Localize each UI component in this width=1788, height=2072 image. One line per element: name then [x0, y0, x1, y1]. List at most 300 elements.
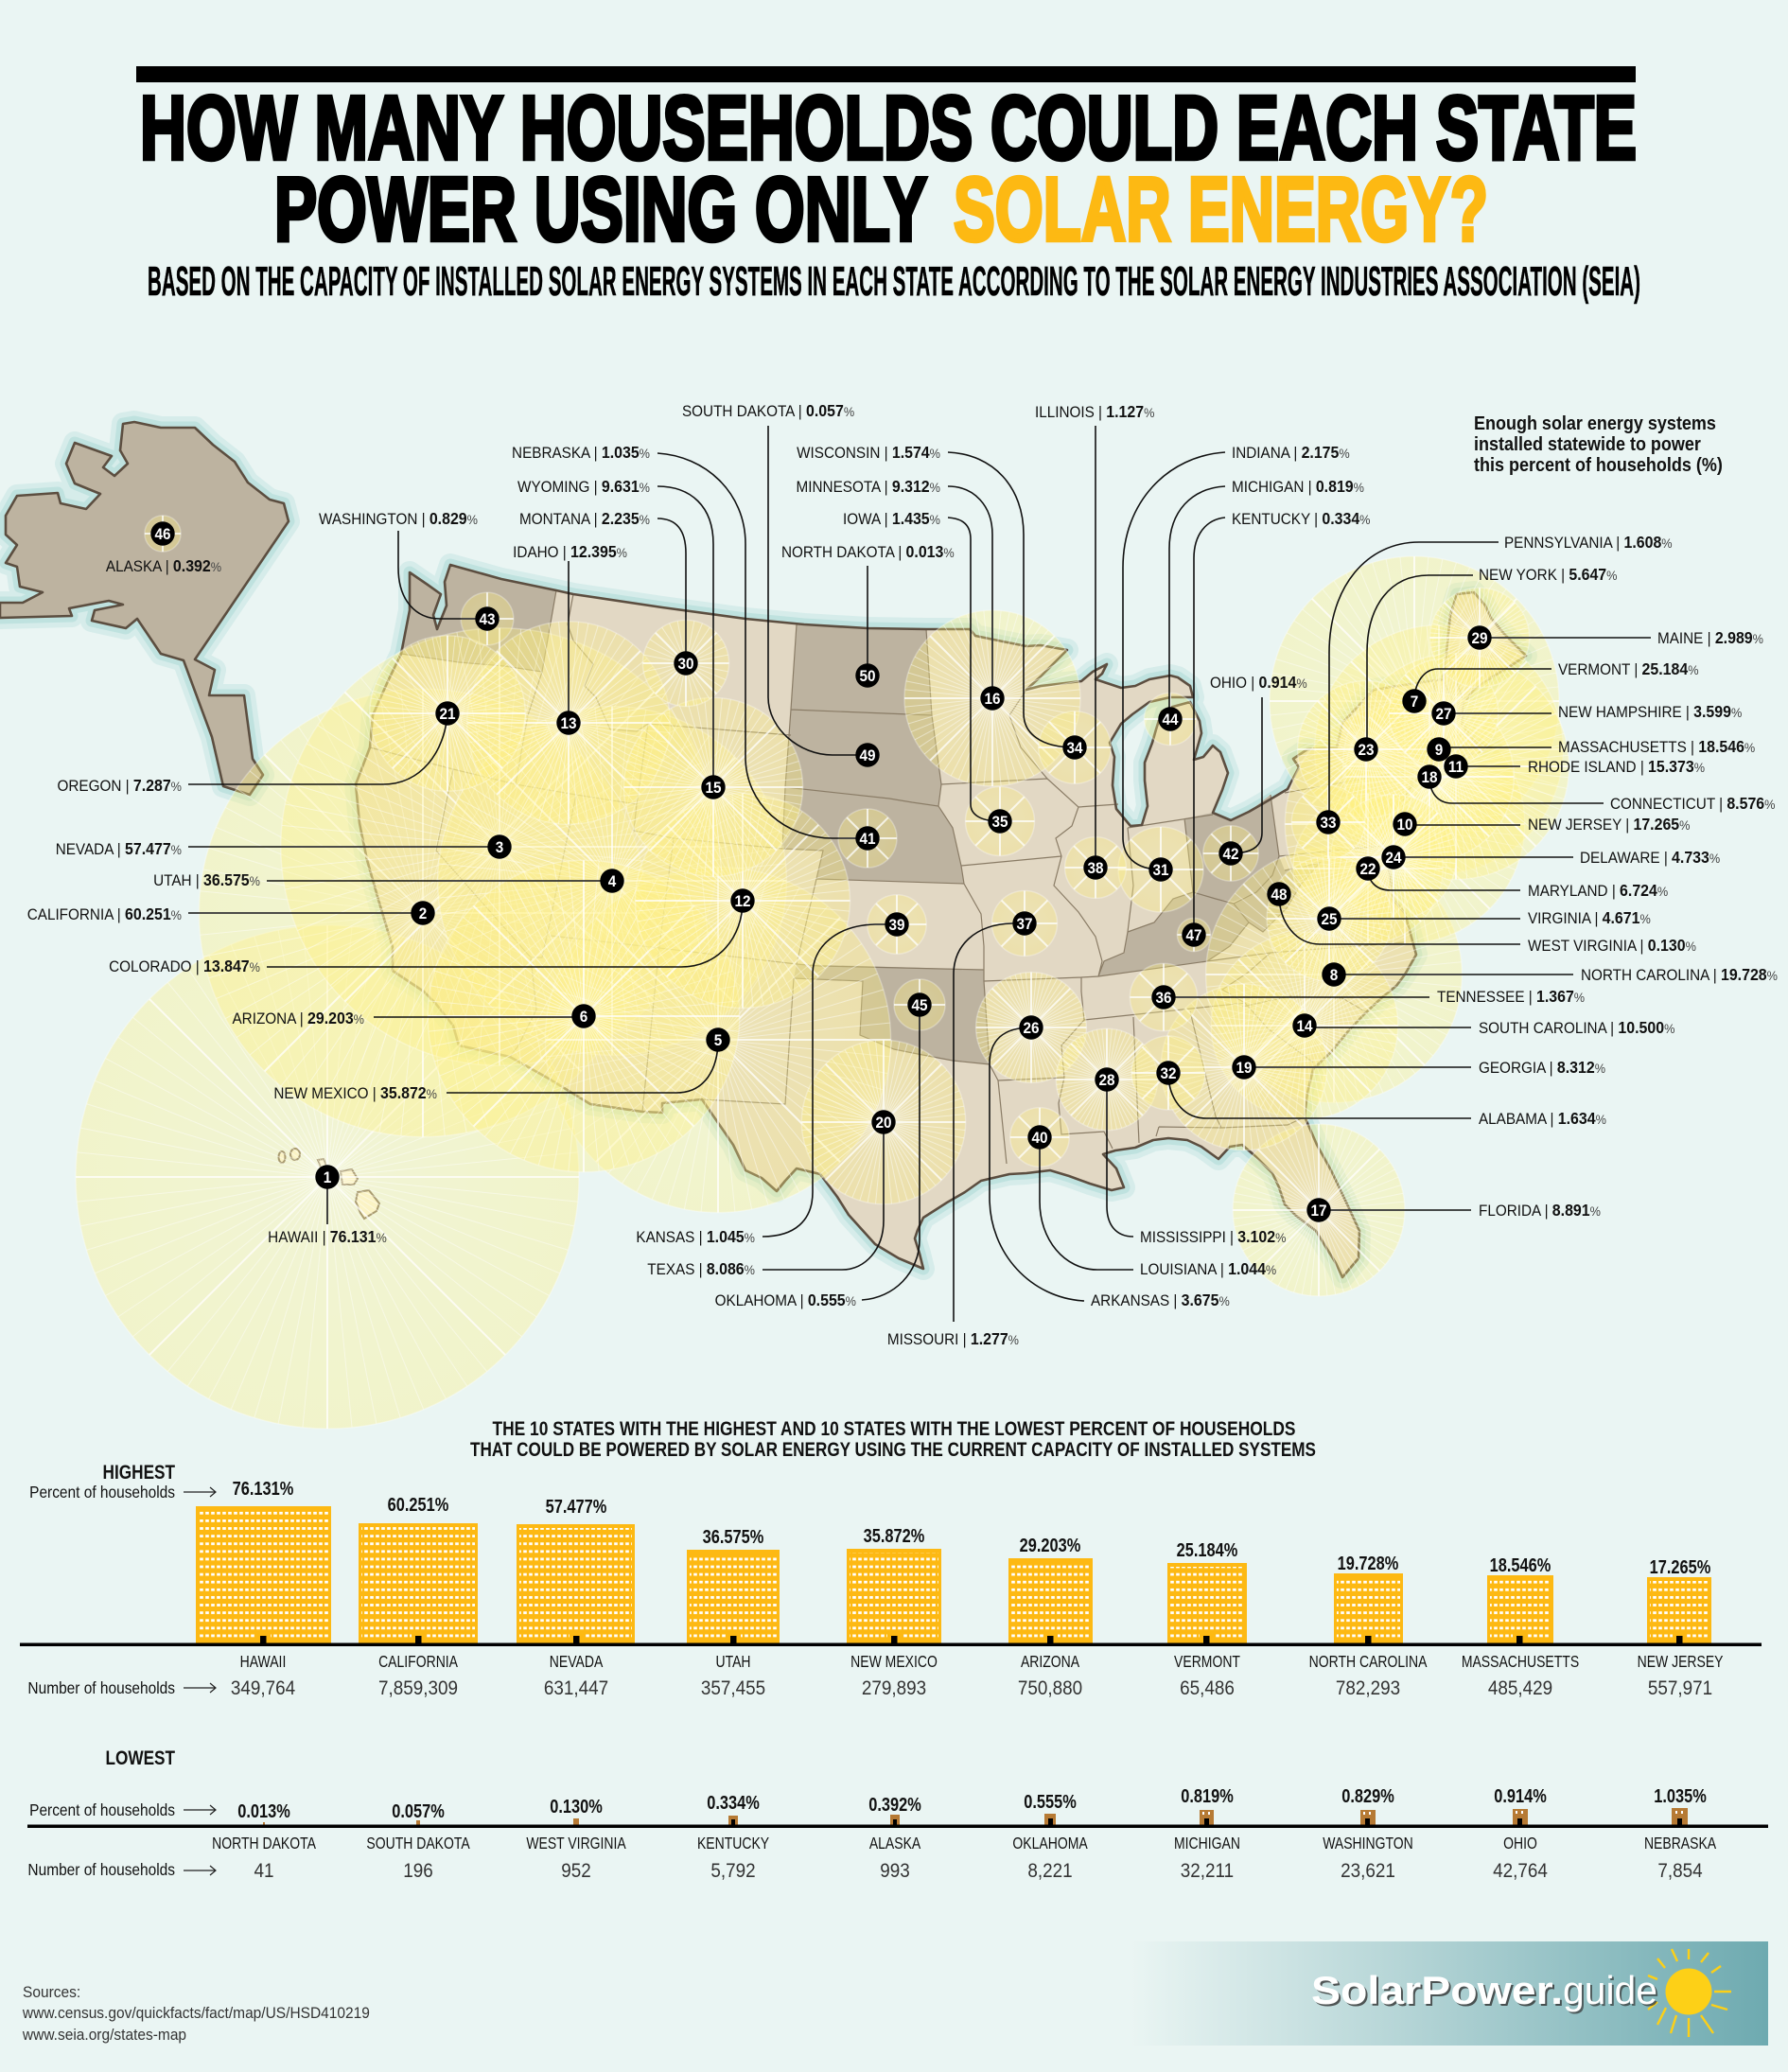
state names: NEW MEXICO	[850, 1654, 938, 1671]
logo wordmark: guide	[1563, 1968, 1657, 2012]
state label: Nebraska	[512, 443, 880, 851]
state label: Maryland: 22	[1359, 860, 1376, 878]
household counts: 782,293	[1336, 1677, 1400, 1699]
state label: Delaware: DELAWARE | 4.733%	[1580, 848, 1720, 867]
state label: Louisiana: 40	[1031, 1129, 1048, 1147]
state label: Texas	[647, 1110, 896, 1278]
state label: Colorado	[109, 888, 755, 975]
state label: West Virginia: 48	[1271, 886, 1288, 904]
state label: New Mexico: 5	[714, 1031, 722, 1049]
state label: Michigan: MICHIGAN | 0.819%	[1232, 477, 1364, 496]
percent values: 35.872%	[864, 1524, 924, 1546]
sources: Sources:	[23, 1985, 80, 2001]
state names: HAWAII	[240, 1654, 286, 1671]
state names: MICHIGAN	[1174, 1835, 1240, 1853]
percent values: 25.184%	[1177, 1538, 1237, 1560]
state label: Rhode Island: 11	[1448, 758, 1464, 776]
state label: North Dakota	[781, 542, 955, 688]
state label: Connecticut	[1417, 764, 1776, 813]
logo wordmark: guide	[1565, 1970, 1659, 2014]
state label: Vermont: 7	[1411, 693, 1418, 711]
sun: Louisiana	[998, 1096, 1081, 1179]
legend note: this percent of households (%)	[1474, 455, 1723, 476]
state label: New Hampshire	[1431, 701, 1742, 726]
household counts: 42,764	[1493, 1860, 1548, 1882]
row captions: highest: Percent of households	[29, 1483, 175, 1501]
state label: Missouri	[887, 911, 1037, 1348]
percent values: 0.914%	[1494, 1784, 1547, 1806]
sun: Pennsylvania	[1276, 770, 1380, 874]
state label: Wisconsin	[797, 443, 1087, 760]
sun: Washington	[461, 592, 514, 645]
state label: Alaska: ALASKA | 0.392%	[106, 556, 221, 575]
household counts: 65,486	[1180, 1677, 1235, 1699]
household counts: 631,447	[544, 1677, 608, 1699]
sun: Texas	[767, 1006, 1000, 1238]
sun: Oklahoma	[894, 979, 945, 1030]
state names: OKLAHOMA	[1012, 1835, 1088, 1853]
hawaiian islands	[278, 1149, 379, 1219]
legend note: installed statewide to power	[1474, 434, 1701, 455]
state names: OHIO	[1503, 1835, 1537, 1853]
state label: Michigan: 44	[1162, 711, 1179, 729]
state names	[240, 1654, 1724, 1671]
sun: Massachusetts	[1263, 573, 1615, 925]
state names: WASHINGTON	[1323, 1835, 1413, 1853]
sources: www.seia.org/states-map	[22, 2028, 186, 2044]
household counts: 952	[561, 1860, 591, 1882]
state label: Utah: UTAH | 36.575%	[153, 870, 260, 889]
state label: Georgia	[1232, 1055, 1605, 1080]
sun: Delaware	[1305, 768, 1482, 946]
state label: Delaware: 24	[1385, 849, 1402, 867]
state label: Kentucky	[1182, 509, 1371, 947]
state label: Wisconsin: 34	[1066, 739, 1083, 757]
state names: NEW JERSEY	[1638, 1654, 1724, 1671]
state label: Massachusetts: 9	[1435, 741, 1443, 759]
household counts: 993	[880, 1860, 910, 1882]
row captions: lowest	[27, 1748, 216, 1879]
percent values: 0.130%	[550, 1795, 603, 1817]
state label: Kansas: 39	[888, 916, 905, 934]
sun: Connecticut	[1310, 658, 1549, 896]
state names: CALIFORNIA	[378, 1654, 458, 1671]
percent values: 36.575%	[703, 1525, 763, 1547]
household counts: 557,971	[1648, 1677, 1712, 1699]
sources: www.census.gov/quickfacts/fact/map/US/HSD410219	[22, 2006, 370, 2022]
state label: New Jersey: 10	[1396, 816, 1413, 834]
tiny bars	[263, 1808, 1688, 1825]
sun: Nebraska	[826, 797, 909, 880]
state names: UTAH	[715, 1654, 751, 1671]
sources	[22, 1985, 370, 2044]
sun: Ohio	[1192, 815, 1270, 892]
state label: Massachusetts: MASSACHUSETTS | 18.546%	[1558, 737, 1755, 756]
household counts: 485,429	[1488, 1677, 1552, 1699]
state label: Louisiana: LOUISIANA | 1.044%	[1140, 1259, 1276, 1278]
state label: New Mexico	[273, 1027, 730, 1102]
state borders	[370, 590, 1468, 1164]
state label: California: CALIFORNIA | 60.251%	[27, 904, 182, 923]
state label: Rhode Island	[1444, 754, 1705, 779]
state label: North Carolina: NORTH CAROLINA | 19.728%	[1581, 965, 1778, 984]
state names: NORTH DAKOTA	[212, 1835, 316, 1853]
sun: Illinois	[1052, 824, 1139, 911]
household counts: 41	[254, 1860, 274, 1882]
state label: Alabama: 32	[1160, 1064, 1177, 1082]
state label: Nevada: 3	[496, 838, 503, 856]
state label: Montana	[519, 509, 698, 676]
sun: Rhode Island	[1296, 606, 1616, 926]
household counts: 8,221	[1027, 1860, 1073, 1882]
state label: Utah	[153, 869, 624, 893]
sun: Mississippi	[1035, 1008, 1179, 1151]
state names: NORTH CAROLINA	[1309, 1654, 1428, 1671]
state label: Connecticut: CONNECTICUT | 8.576%	[1610, 794, 1776, 813]
sun: Utah	[365, 634, 859, 1128]
title highlight: SOLAR ENERGY?	[954, 159, 1488, 260]
state label: Illinois	[1035, 402, 1155, 880]
household counts: 5,792	[710, 1860, 756, 1882]
state label: Alabama	[1156, 1061, 1606, 1128]
percent values: 0.334%	[707, 1791, 760, 1813]
state label: Indiana: 31	[1152, 861, 1169, 879]
state label: Pennsylvania: PENNSYLVANIA | 1.608%	[1504, 533, 1673, 552]
state label: Maine	[1467, 625, 1763, 650]
state label: Wyoming: 15	[705, 779, 722, 797]
sun: Iowa	[951, 772, 1049, 870]
state label: Mississippi	[1095, 1067, 1287, 1246]
state label: South Dakota	[682, 401, 880, 767]
state label: Tennessee: 36	[1155, 989, 1172, 1007]
state label: Virginia	[1317, 906, 1651, 931]
dark states: under 1%	[401, 565, 1320, 1064]
state label: Idaho	[513, 542, 627, 735]
state label: Hawaii	[268, 1165, 387, 1246]
state label: Nebraska: NEBRASKA | 1.035%	[512, 443, 650, 462]
sun: Colorado	[590, 748, 895, 1053]
state label: California: 2	[419, 904, 427, 922]
state label: Pennsylvania: 33	[1320, 814, 1337, 832]
sun: Arkansas	[953, 949, 1110, 1106]
state label: Virginia: VIRGINIA | 4.671%	[1528, 908, 1651, 927]
sun: Vermont	[1210, 497, 1619, 905]
legend note	[1474, 413, 1723, 476]
state label: Idaho: IDAHO | 12.395%	[513, 542, 627, 561]
state label: Kansas: KANSAS | 1.045%	[636, 1227, 755, 1246]
chart heading: THAT COULD BE POWERED BY SOLAR ENERGY USING THE CURRENT CAPACITY OF INSTALLED SYSTEMS	[470, 1439, 1316, 1461]
state label: Indiana	[1123, 443, 1350, 882]
sun: Montana	[625, 603, 746, 724]
sun: Minnesota	[868, 573, 1117, 823]
state label: Indiana: INDIANA | 2.175%	[1232, 443, 1350, 462]
state label: Mississippi: MISSISSIPPI | 3.102%	[1140, 1227, 1287, 1246]
state label: New Jersey	[1393, 812, 1691, 836]
state label: Vermont: VERMONT | 25.184%	[1558, 659, 1699, 678]
state names: NEBRASKA	[1644, 1835, 1717, 1853]
state label: Iowa: 35	[991, 813, 1008, 831]
state label: Oklahoma: 45	[911, 996, 928, 1014]
household counts: 349,764	[231, 1677, 295, 1699]
percent values: 1.035%	[1654, 1784, 1707, 1806]
state label: Illinois: 38	[1087, 859, 1104, 877]
sun: Hawaii	[0, 821, 683, 1533]
state label: Ohio	[1210, 673, 1307, 866]
percent values	[233, 1477, 1710, 1577]
logo wordmark	[1311, 1968, 1659, 2014]
state label: Massachusetts	[1427, 737, 1755, 762]
state names: ARIZONA	[1021, 1654, 1080, 1671]
percent values: 19.728%	[1338, 1552, 1398, 1573]
state label: Virginia: 25	[1321, 910, 1338, 928]
state label: Florida: 17	[1310, 1202, 1327, 1220]
state label: Oklahoma: OKLAHOMA | 0.555%	[715, 1291, 856, 1309]
state label: Kansas	[636, 912, 909, 1246]
bars	[196, 1506, 1711, 1644]
state label: New Hampshire: 27	[1435, 705, 1452, 723]
state label: Nebraska: 41	[859, 830, 876, 848]
state label: Oregon: OREGON | 7.287%	[57, 776, 182, 795]
bar chart: highest	[20, 1463, 1762, 1699]
title line 2: POWER USING ONLY	[274, 159, 927, 260]
sun: Missouri	[978, 877, 1071, 970]
household counts: 196	[403, 1860, 433, 1882]
state label: Montana: 30	[677, 655, 694, 673]
state label: Colorado: 12	[734, 892, 751, 910]
state label: Wisconsin: WISCONSIN | 1.574%	[797, 443, 940, 462]
percent values: 0.392%	[868, 1793, 921, 1815]
chart heading	[470, 1418, 1316, 1461]
state label: New York	[1354, 565, 1618, 762]
state label: Ohio: 42	[1222, 845, 1239, 863]
state label: Alaska: 46	[154, 525, 171, 543]
state label: Louisiana	[1027, 1125, 1276, 1278]
state label: Wyoming	[517, 477, 726, 799]
state label: South Dakota: 49	[859, 746, 876, 764]
state label: Arkansas: 26	[1023, 1019, 1040, 1037]
state label: Maryland: MARYLAND | 6.724%	[1528, 881, 1668, 900]
state label: Georgia: GEORGIA | 8.312%	[1479, 1058, 1605, 1077]
state names: SOUTH DAKOTA	[366, 1835, 470, 1853]
row captions: lowest: Number of households	[27, 1860, 175, 1879]
household counts: 23,621	[1341, 1860, 1395, 1882]
sun: Georgia	[1127, 950, 1361, 1185]
state label: Florida	[1306, 1198, 1601, 1222]
sun: Alaska	[145, 516, 181, 552]
state label: Connecticut: 18	[1421, 768, 1438, 786]
sun: Kansas	[855, 883, 938, 966]
sun: Kentucky	[1177, 918, 1211, 952]
state label: Alaska	[106, 521, 221, 575]
state label: Wyoming: WYOMING | 9.631%	[517, 477, 650, 496]
state label: Florida: FLORIDA | 8.891%	[1479, 1201, 1601, 1220]
state label: Hawaii: 1	[324, 1168, 331, 1186]
state label: Hawaii: HAWAII | 76.131%	[268, 1227, 387, 1246]
state label: Arizona: 6	[580, 1008, 587, 1026]
household counts	[254, 1860, 1703, 1882]
state label: Iowa: IOWA | 1.435%	[843, 509, 940, 528]
state label: Maine: 29	[1471, 629, 1488, 647]
state label: Maryland	[1356, 856, 1668, 900]
sun: North Carolina	[1153, 794, 1515, 1155]
sun: Oregon	[338, 604, 557, 823]
state label: West Virginia	[1267, 882, 1696, 955]
sun: New Jersey	[1236, 655, 1574, 993]
state label: California	[27, 901, 435, 925]
percent values: 0.555%	[1024, 1790, 1077, 1812]
state label: New Jersey: NEW JERSEY | 17.265%	[1528, 815, 1691, 834]
state label: Arizona	[232, 1004, 596, 1028]
state label: Colorado: COLORADO | 13.847%	[109, 957, 260, 975]
percent values: 17.265%	[1650, 1555, 1710, 1577]
sun: Michigan	[1144, 693, 1197, 746]
state label: Nevada: NEVADA | 57.477%	[56, 839, 182, 858]
state label: South Carolina: 14	[1296, 1017, 1313, 1035]
state label: Iowa	[843, 509, 1012, 834]
state label: South Carolina: SOUTH CAROLINA | 10.500%	[1479, 1018, 1674, 1037]
state names: VERMONT	[1174, 1654, 1240, 1671]
state label: Alabama: ALABAMA | 1.634%	[1479, 1109, 1606, 1128]
household counts: 7,859,309	[378, 1677, 458, 1699]
state label: Texas: 20	[875, 1114, 892, 1132]
state label: Mississippi: 28	[1098, 1071, 1115, 1089]
sun: Arizona	[363, 796, 804, 1237]
state label: Idaho: 13	[560, 714, 577, 732]
state label: Pennsylvania	[1316, 533, 1673, 834]
icon: sun	[1648, 1949, 1731, 2037]
state names	[212, 1835, 1717, 1853]
state label: Rhode Island: RHODE ISLAND | 15.373%	[1528, 757, 1705, 776]
percent values: 0.013%	[237, 1800, 290, 1821]
state label: Ohio: OHIO | 0.914%	[1210, 673, 1307, 692]
state label: Washington	[319, 509, 500, 631]
sun: Wisconsin	[1024, 696, 1126, 799]
percent values: 76.131%	[233, 1477, 293, 1499]
state label: Minnesota: 16	[984, 690, 1001, 708]
state label: Tennessee	[1151, 985, 1585, 1010]
percent values	[237, 1784, 1707, 1821]
state label: Minnesota: MINNESOTA | 9.312%	[797, 477, 940, 496]
household counts: 279,893	[862, 1677, 926, 1699]
chart heading: THE 10 STATES WITH THE HIGHEST AND 10 STATES WITH THE LOWEST PERCENT OF HOUSEHOLDS	[492, 1418, 1296, 1440]
sun: Nevada	[190, 537, 809, 1156]
percent values: 57.477%	[546, 1495, 606, 1517]
percent values: 18.546%	[1490, 1554, 1551, 1575]
state label: Texas: TEXAS | 8.086%	[647, 1259, 755, 1278]
state label: New Hampshire: NEW HAMPSHIRE | 3.599%	[1558, 702, 1742, 721]
row captions: highest: HIGHEST	[103, 1463, 175, 1484]
bar chart: lowest	[27, 1748, 1768, 1882]
state label: Arizona: ARIZONA | 29.203%	[232, 1009, 364, 1027]
state label: Delaware	[1381, 845, 1720, 869]
state label: Nevada	[56, 834, 512, 859]
map: base states	[0, 422, 1526, 1277]
row captions: lowest: LOWEST	[105, 1748, 175, 1769]
state label: Tennessee: TENNESSEE | 1.367%	[1437, 987, 1585, 1006]
state names: NEVADA	[550, 1654, 604, 1671]
logo wordmark: SolarPower.	[1311, 1968, 1563, 2012]
sun: Idaho	[425, 579, 712, 867]
state names: MASSACHUSETTS	[1462, 1654, 1579, 1671]
row captions: highest: Number of households	[27, 1678, 175, 1697]
state names: ALASKA	[869, 1835, 921, 1853]
sun: Alabama	[1116, 1021, 1220, 1125]
state label: North Carolina	[1322, 962, 1778, 987]
state label: Arkansas: ARKANSAS | 3.675%	[1091, 1291, 1230, 1309]
percent values: 0.829%	[1341, 1784, 1394, 1806]
state label: North Carolina: 8	[1330, 966, 1338, 984]
state label: New Mexico: NEW MEXICO | 35.872%	[273, 1083, 437, 1102]
state label: Michigan	[1158, 477, 1364, 731]
state label: Missouri: 37	[1016, 915, 1033, 933]
state label: Montana: MONTANA | 2.235%	[519, 509, 650, 528]
sun: Indiana	[1100, 809, 1221, 930]
row captions: highest	[27, 1463, 216, 1697]
state label: South Dakota: SOUTH DAKOTA | 0.057%	[682, 401, 854, 420]
sun: Maryland	[1262, 763, 1474, 975]
state label: Georgia: 19	[1236, 1059, 1253, 1077]
state label: New York: NEW YORK | 5.647%	[1479, 565, 1618, 584]
state names: KENTUCKY	[697, 1835, 770, 1853]
sun: New Hampshire	[1366, 636, 1521, 791]
state label: Washington: 43	[479, 610, 496, 628]
logo: SolarPower.guide	[1131, 1941, 1768, 2046]
household counts: 32,211	[1181, 1860, 1234, 1882]
title block	[136, 66, 1640, 305]
state label: Oregon	[57, 701, 460, 795]
state label: Minnesota	[797, 477, 1005, 711]
sun: South Carolina	[1172, 893, 1437, 1158]
sun: New Mexico	[474, 796, 962, 1284]
state label: Illinois: ILLINOIS | 1.127%	[1035, 402, 1155, 421]
suns: one per state, area proportional to percent	[0, 497, 1619, 1533]
national outline	[356, 565, 1526, 1277]
sun: Florida	[1197, 1088, 1441, 1332]
state names: WEST VIRGINIA	[526, 1835, 626, 1853]
percent values: 0.819%	[1181, 1784, 1234, 1806]
sun: New York	[1269, 652, 1464, 847]
state label: Kentucky: KENTUCKY | 0.334%	[1232, 509, 1371, 528]
tiny windows	[1202, 1811, 1683, 1815]
logo wordmark: SolarPower.	[1313, 1970, 1565, 2014]
state label: Oklahoma	[715, 992, 932, 1309]
state label: New York: 23	[1358, 741, 1375, 759]
state label: Kentucky: 47	[1185, 926, 1202, 944]
state label: Missouri: MISSOURI | 1.277%	[887, 1329, 1019, 1348]
household counts	[231, 1677, 1712, 1699]
household counts: 357,455	[701, 1677, 765, 1699]
percent values: 60.251%	[388, 1493, 448, 1515]
state label: Maine: MAINE | 2.989%	[1657, 628, 1763, 647]
household counts: 750,880	[1018, 1677, 1082, 1699]
state label: West Virginia: WEST VIRGINIA | 0.130%	[1528, 936, 1696, 955]
state label: Arkansas	[990, 1015, 1230, 1309]
legend note: Enough solar energy systems	[1474, 413, 1716, 434]
state label: South Carolina	[1292, 1013, 1674, 1038]
sun: Tennessee	[1116, 950, 1211, 1045]
row captions: lowest: Percent of households	[29, 1800, 175, 1819]
state label: Oregon: 21	[439, 705, 456, 723]
sun: Virginia	[1241, 831, 1417, 1007]
state label: Vermont	[1402, 659, 1699, 713]
sun: California	[106, 596, 740, 1230]
percent values: 0.057%	[392, 1800, 445, 1821]
state label: Washington: WASHINGTON | 0.829%	[319, 509, 478, 528]
state label: North Dakota: NORTH DAKOTA | 0.013%	[781, 542, 955, 561]
state label: North Dakota: 50	[859, 667, 876, 685]
household counts: 7,854	[1657, 1860, 1703, 1882]
percent values: 29.203%	[1020, 1534, 1080, 1555]
